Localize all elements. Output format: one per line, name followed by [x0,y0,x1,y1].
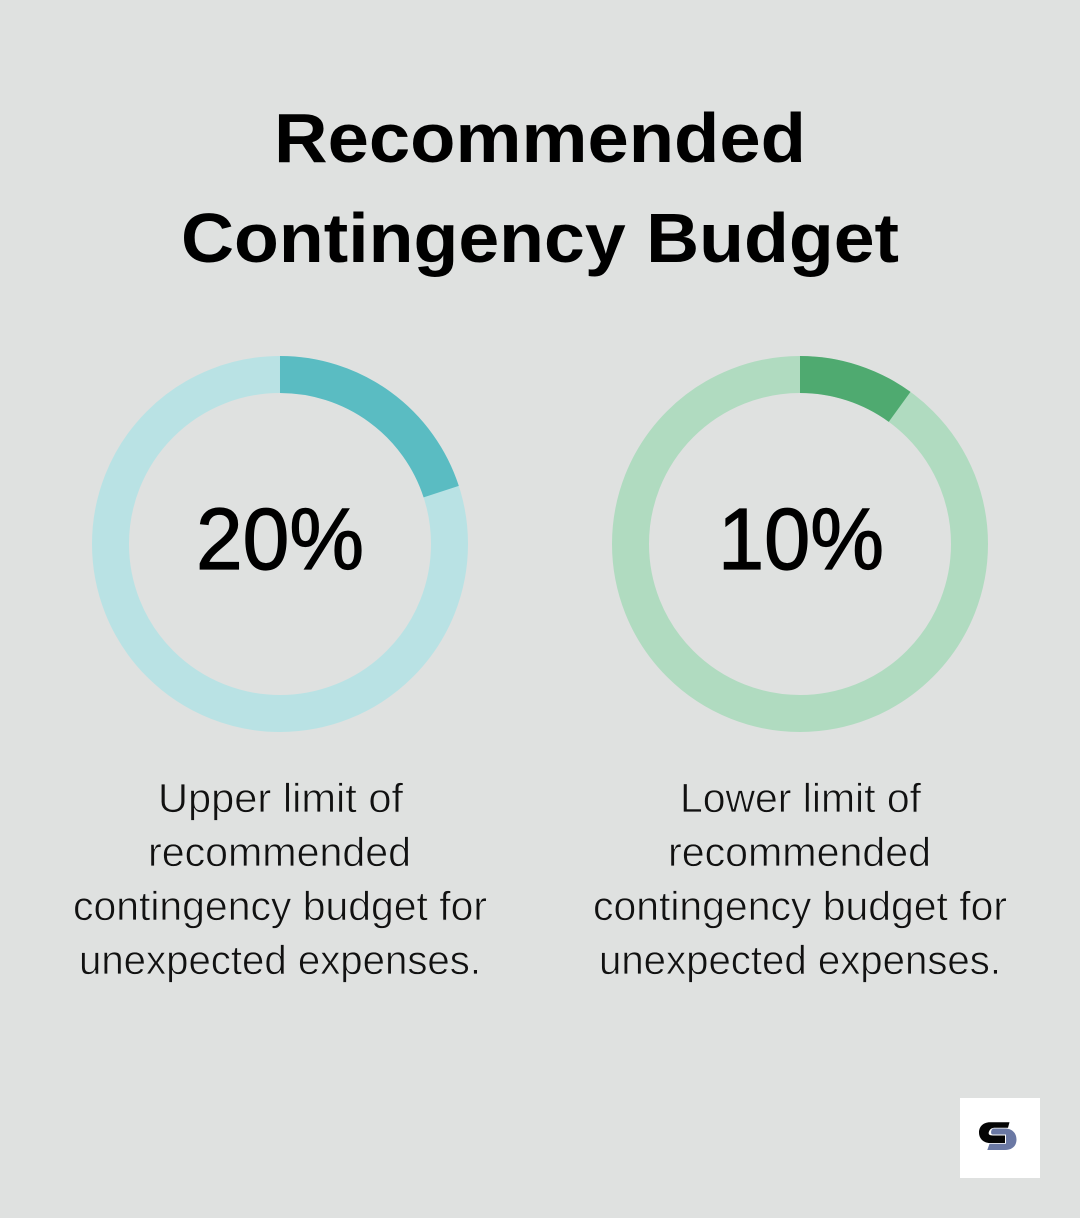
icon: logo badge [960,1098,1040,1178]
description: upper limit: unexpected expenses. [79,937,481,983]
panel: lower limit 10% [593,374,1007,983]
description: lower limit: recommended [668,829,931,875]
description: upper limit: contingency budget for [73,883,487,929]
title [181,99,899,277]
panel: upper limit 20% [73,374,487,983]
value: 20%: 20% [196,491,364,588]
title: Contingency Budget [181,199,899,277]
description: upper limit: recommended [148,829,411,875]
value: 10%: 10% [718,491,884,588]
description: lower limit [593,775,1007,983]
donut chart: 10% [630,374,970,714]
description: lower limit: unexpected expenses. [599,937,1001,983]
description: lower limit: Lower limit of [680,775,922,821]
description: upper limit [73,775,487,983]
donut chart: 20% [110,374,450,714]
title: Recommended [274,99,806,177]
description: upper limit: Upper limit of [158,775,404,821]
description: lower limit: contingency budget for [593,883,1007,929]
